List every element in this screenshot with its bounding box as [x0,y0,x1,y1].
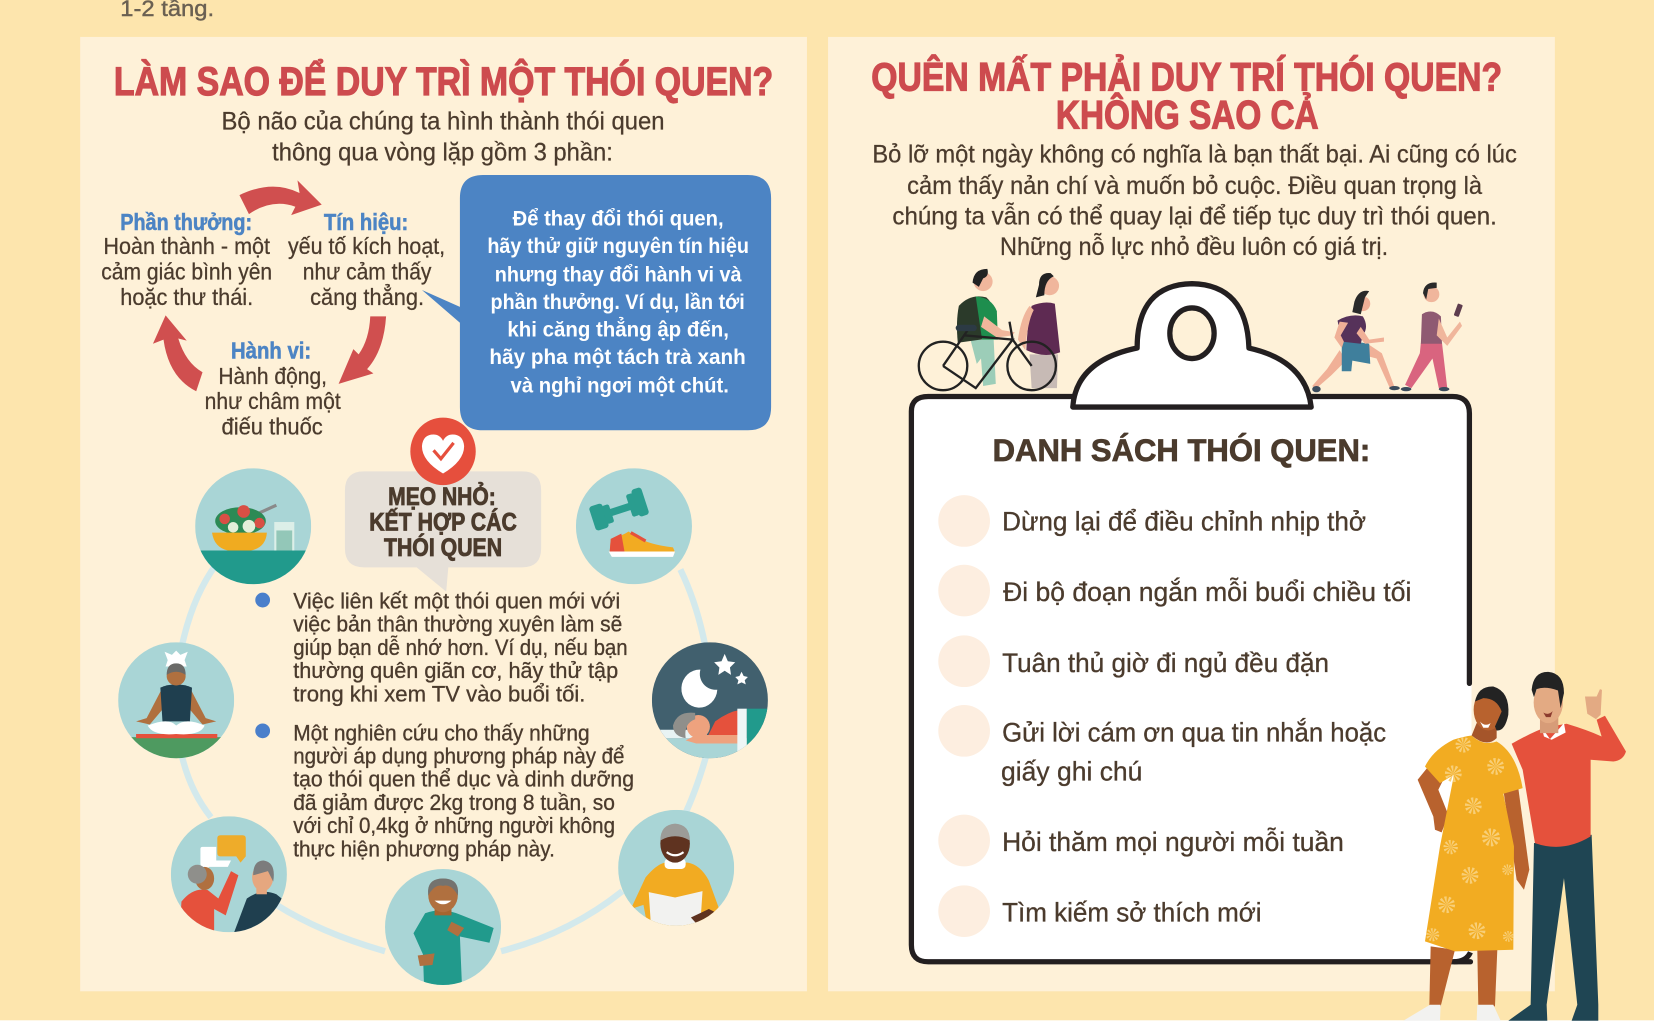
paragraph right: Những nỗ lực nhỏ đều luôn có giá trị. [1000,232,1388,261]
label: reward: hoặc thư thái. [120,284,253,310]
label: behaviour: Hành vi: [231,338,311,364]
tip bullets: việc bản thân thường xuyên làm sẽ [293,612,622,637]
icon: heart check [410,418,476,485]
man [1508,835,1598,1021]
tip bullets: tạo thói quen thể dục và dinh dưỡng [293,767,634,792]
checklist item 3 [938,635,1329,687]
intro text: thông qua vòng lặp gồm 3 phần: [272,138,613,166]
tip bullets: trong khi xem TV vào buổi tối. [293,681,585,706]
title left: LÀM SAO ĐỂ DUY TRÌ MỘT THÓI QUEN? [114,59,773,104]
label: reward: cảm giác bình yên [101,258,272,284]
paragraph right [872,140,1517,261]
checklist heading: DANH SÁCH THÓI QUEN: [993,432,1370,468]
title right: QUÊN MẤT PHẢI DUY TRÍ THÓI QUEN? [871,56,1502,100]
tip bullets: với chỉ 0,4kg ở những người không [293,813,615,838]
checklist item 1: Dừng lại để điều chỉnh nhịp thở [1002,506,1366,536]
tip bubble: KẾT HỢP CÁC [369,508,517,536]
checklist item 5: Hỏi thăm mọi người mỗi tuần [1002,826,1344,857]
tip bubble: MẸO NHỎ: [388,482,496,511]
arrow: cue to behaviour [339,316,386,384]
tip bullets: Việc liên kết một thói quen mới với [293,588,620,613]
arrow: behaviour to reward [153,315,203,391]
people: cyclist and walker [919,269,1060,390]
label: cue: căng thẳng. [310,284,424,310]
icon: exercise [576,468,692,584]
label: behaviour: như châm một [205,388,341,414]
paragraph right: cảm thấy nản chí và muốn bỏ cuộc. Điều quan trọng là [907,172,1483,200]
checklist item 4: giấy ghi chú [1001,756,1142,786]
woman [1418,766,1448,832]
intro text [222,108,665,166]
callout: blue speech bubble: Để thay đổi thói quen, [513,206,724,231]
tip bubble: THÓI QUEN [384,534,502,562]
label: behaviour: Hành động, [218,363,327,389]
tip bullets: đã giảm được 2kg trong 8 tuần, so [293,790,615,815]
icon: gratitude person [385,869,501,987]
checklist item 6 [938,885,1262,937]
panel: how to maintain a habit [80,37,807,991]
checklist item 5 [938,815,1344,866]
ring connecting tip icons [181,564,707,951]
icon: meditation [118,642,234,760]
panel: forgetting a habit [828,37,1555,991]
intro text: Bộ não của chúng ta hình thành thói quen [222,108,665,136]
icon: talking to others [171,816,287,939]
checklist item 6: Tìm kiếm sở thích mới [1002,898,1262,928]
icon: healthy food [195,468,311,584]
label: behaviour: điếu thuốc [222,413,323,439]
checklist item 4 [938,705,1386,786]
label: behaviour [205,338,341,439]
callout: blue speech bubble: nhưng thay đổi hành vi và [495,262,742,287]
tip bullets: người áp dụng phương pháp này để [293,744,624,769]
tip bullets: giúp bạn dễ nhớ hơn. Ví dụ, nếu bạn [293,635,628,660]
paragraph right: Bỏ lỡ một ngày không có nghĩa là bạn thất bại. Ai cũng có lúc [872,140,1517,168]
callout: blue speech bubble: và nghỉ ngơi một chút. [511,372,729,397]
icon: reading person [618,810,734,933]
people: runner and walker [1312,283,1463,392]
clipboard board [911,394,1472,962]
tip bullets: Một nghiên cứu cho thấy những [293,720,590,745]
icon: sleep [652,642,770,761]
checklist item 2: Đi bộ đoạn ngắn mỗi buổi chiều tối [1003,576,1411,607]
callout: blue speech bubble: khi căng thẳng ập đến, [507,316,729,341]
label: cue: như cảm thấy [303,258,432,284]
checklist item 2 [938,565,1411,616]
callout: blue speech bubble [422,175,771,430]
callout: blue speech bubble: hãy pha một tách trà xanh [489,344,746,369]
arrow: reward to cue [239,180,322,215]
checklist item 4: Gửi lời cám ơn qua tin nhắn hoặc [1002,716,1386,747]
tip bullets [255,588,634,861]
clipboard clip [1073,284,1311,407]
label: cue: yếu tố kích hoạt, [288,233,445,259]
checklist item 3: Tuân thủ giờ đi ngủ đều đặn [1002,648,1329,678]
label: cue: Tín hiệu: [324,209,408,235]
tip bullets: thường quên giãn cơ, hãy thử tập [293,658,618,683]
label: reward: Hoàn thành - một [103,233,271,259]
tip bullets: thực hiện phương pháp này. [293,836,555,861]
label: reward: Phần thưởng: [120,209,252,235]
people: couple with thumbs up [1403,672,1626,1021]
paragraph right: chúng ta vẫn có thể quay lại để tiếp tục duy trì thói quen. [892,202,1497,231]
callout: blue speech bubble: phần thưởng. Ví dụ, lần tới [491,289,745,314]
checklist item 1 [938,495,1366,547]
title right [871,56,1502,138]
label: reward [101,209,272,310]
callout: blue speech bubble: hãy thử giữ nguyên tín hiệu [487,233,749,258]
title right: KHÔNG SAO CẢ [1056,93,1319,138]
clipboard bottom corner behind figures [1454,952,1470,962]
label: cue [288,209,445,310]
tip bubble [345,471,541,592]
